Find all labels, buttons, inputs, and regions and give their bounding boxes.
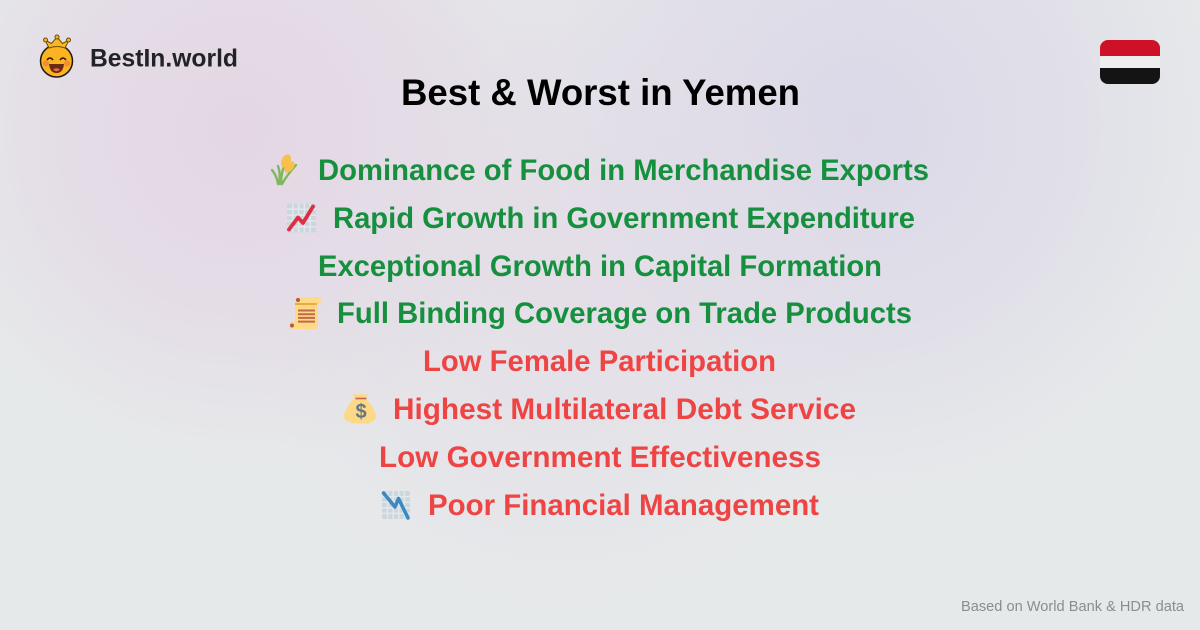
logo: crown smiley [40,35,72,77]
item: government effectiveness: Low Government Effectiveness [379,441,821,474]
title: Best & Worst in Yemen [401,71,800,113]
brand name: BestIn.world [90,44,238,72]
item: female participation: Low Female Participation [423,345,776,378]
item: food exports: Dominance of Food in Merchandise Exports [318,154,929,187]
icon: scroll [289,297,321,329]
item: government expenditure: Rapid Growth in Government Expenditure [333,202,915,235]
icon: money bag: $ [355,401,367,423]
list: best and worst items [272,153,929,522]
source note: Based on World Bank & HDR data [961,599,1185,615]
icon: chart decreasing [382,491,410,519]
icon: chart increasing [287,204,316,232]
item: multilateral debt service: Highest Multilateral Debt Service [393,393,856,426]
icon: money bag [344,393,376,424]
item: capital formation: Exceptional Growth in Capital Formation [318,250,882,283]
item: binding coverage: Full Binding Coverage on Trade Products [337,297,912,330]
item: financial management: Poor Financial Management [428,489,819,522]
icon: sheaf of rice [272,153,297,184]
flag: Yemen [1100,40,1160,84]
